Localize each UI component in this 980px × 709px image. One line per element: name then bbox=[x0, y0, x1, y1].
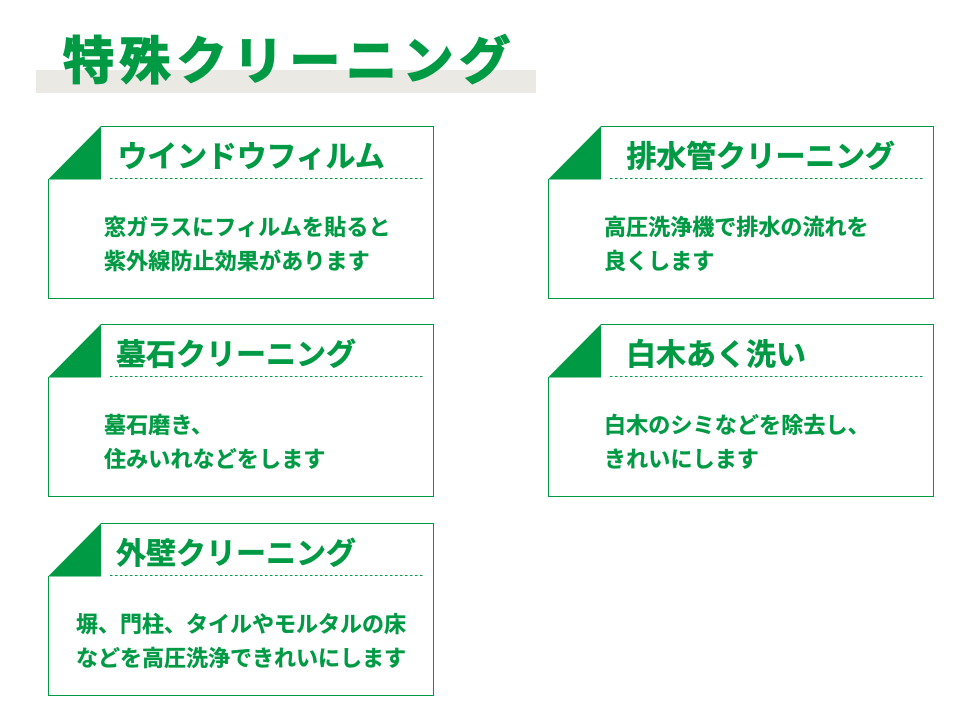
text block bbox=[104, 413, 326, 472]
heading: ウインドウフィルム bbox=[118, 141, 384, 174]
text block bbox=[76, 612, 406, 671]
text block bbox=[104, 215, 391, 274]
text block: などを高圧洗浄できれいにします bbox=[76, 646, 406, 671]
text block: 墓石磨き、 bbox=[104, 413, 213, 438]
card frame bbox=[548, 126, 934, 299]
text block: 白木のシミなどを除去し、 bbox=[604, 413, 870, 438]
title: 特殊クリーニング bbox=[63, 33, 516, 90]
text block bbox=[604, 215, 869, 274]
card frame bbox=[548, 324, 934, 497]
text block bbox=[604, 413, 870, 472]
panel: white wood cleaning bbox=[548, 324, 934, 497]
card frame bbox=[48, 126, 434, 299]
title band bbox=[36, 70, 536, 93]
text block: 住みいれなどをします bbox=[104, 447, 326, 472]
panel: exterior wall cleaning bbox=[48, 523, 434, 696]
heading: 墓石クリーニング bbox=[116, 339, 356, 372]
heading: 白木あく洗い bbox=[626, 339, 806, 372]
panel: window film bbox=[48, 126, 434, 299]
card frame bbox=[48, 523, 434, 696]
heading: 排水管クリーニング bbox=[626, 141, 895, 174]
text block: 塀、門柱、タイルやモルタルの床 bbox=[76, 612, 406, 637]
text block: きれいにします bbox=[604, 447, 759, 472]
panel: gravestone cleaning bbox=[48, 324, 434, 497]
text block: 高圧洗浄機で排水の流れを bbox=[604, 215, 869, 240]
text block: 良くします bbox=[604, 249, 714, 274]
text block: 窓ガラスにフィルムを貼ると bbox=[104, 215, 391, 240]
card frame bbox=[48, 324, 434, 497]
heading: 外壁クリーニング bbox=[116, 538, 356, 571]
panel: drain cleaning bbox=[548, 126, 934, 299]
text block: 紫外線防止効果があります bbox=[104, 249, 370, 274]
